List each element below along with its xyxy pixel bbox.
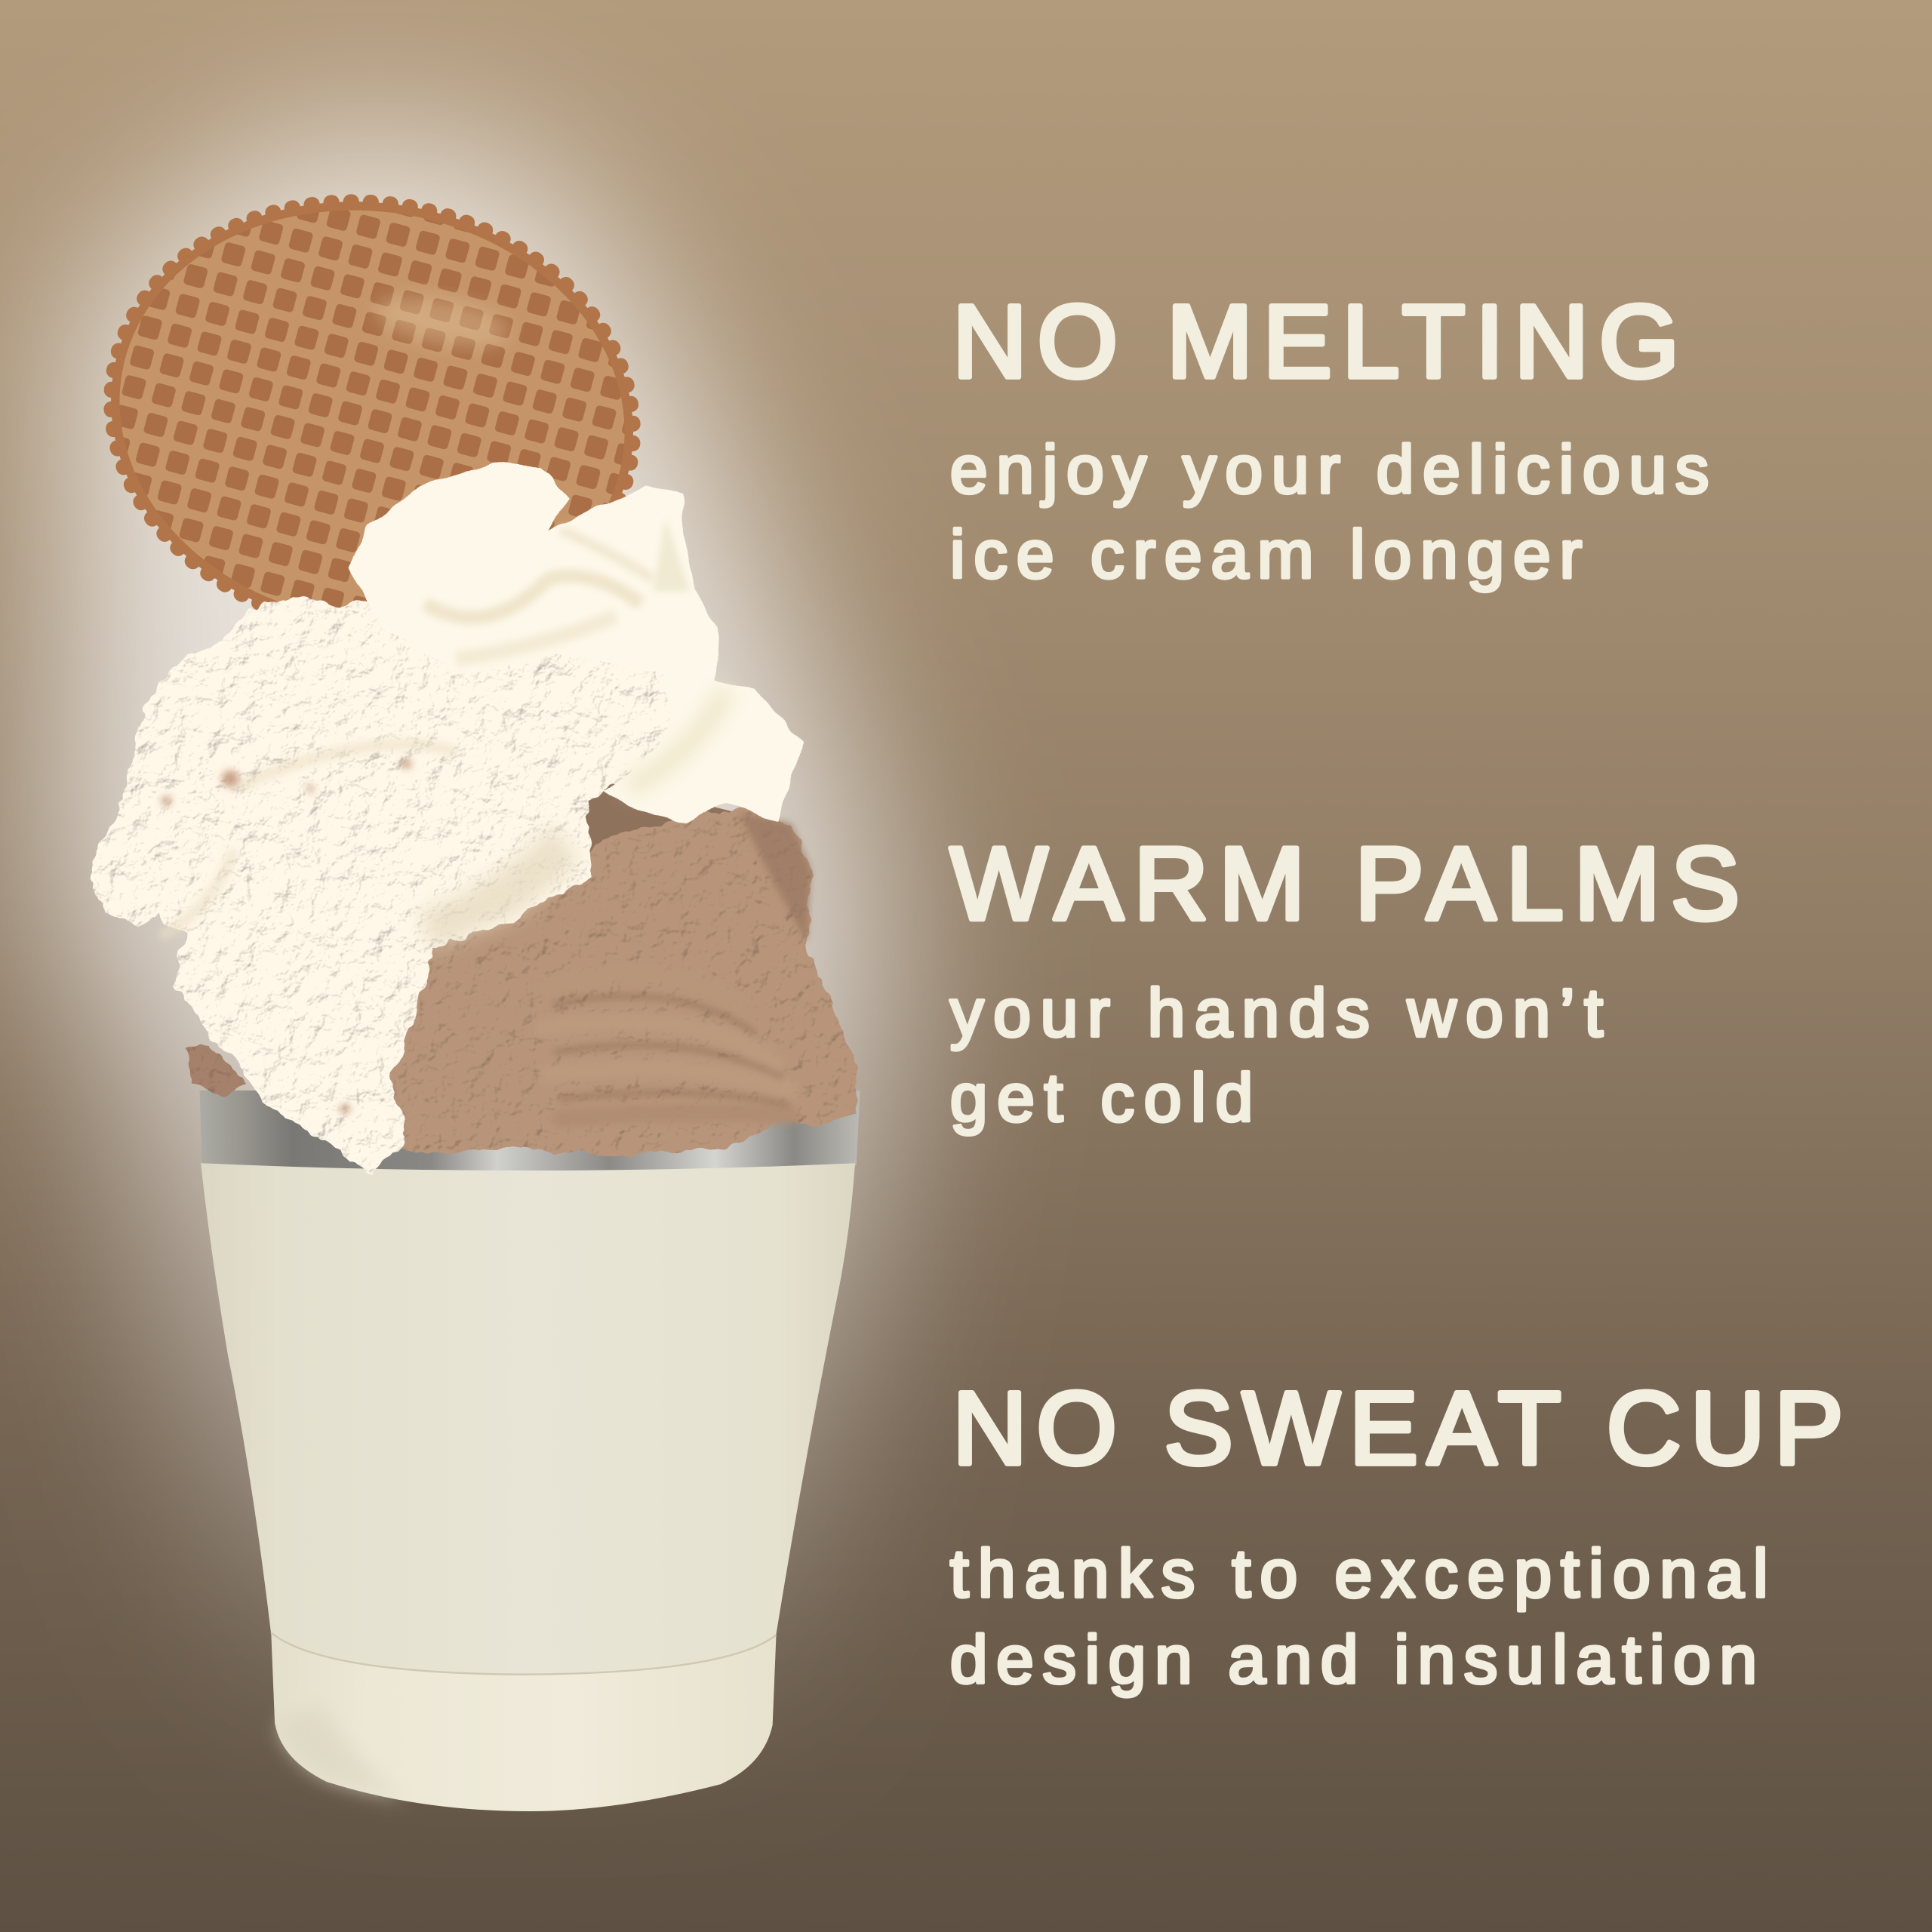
- feature 3: no sweat cup: [950, 1371, 1843, 1698]
- description: your hands won’t: [950, 976, 1603, 1051]
- nut flecks: [162, 759, 411, 1114]
- piped ridges on chocolate: [542, 974, 789, 1118]
- icon: waffle cookie: [77, 161, 668, 672]
- vanilla scoop: [89, 600, 678, 1177]
- cup base: [271, 1632, 777, 1811]
- soft white glow behind product: [49, 136, 888, 1725]
- description: [950, 432, 1709, 593]
- description: get cold: [950, 1061, 1253, 1137]
- back scoop shade: [740, 814, 811, 943]
- feature 2: warm palms: [950, 826, 1740, 1137]
- dark crumb piece behind scoop: [185, 1042, 247, 1094]
- description: thanks to exceptional: [950, 1537, 1768, 1612]
- feature 1: no melting: [950, 285, 1709, 593]
- shading on vanilla: [419, 826, 579, 949]
- heading: NO SWEAT CUP: [952, 1371, 1843, 1487]
- heading: NO MELTING: [952, 285, 1679, 400]
- chocolate scoop: [370, 807, 860, 1155]
- description: [950, 976, 1603, 1137]
- description: ice cream longer: [950, 518, 1582, 593]
- cup body: [201, 1163, 855, 1675]
- description: design and insulation: [950, 1623, 1757, 1698]
- heading: WARM PALMS: [950, 826, 1740, 942]
- whipped cream: [349, 463, 803, 823]
- shadow backing between scoops: [579, 777, 789, 912]
- metal rim of the cup: [199, 1091, 860, 1172]
- description: [950, 1537, 1768, 1698]
- description: enjoy your delicious: [950, 432, 1709, 508]
- product: ice cream cup: [77, 161, 860, 1811]
